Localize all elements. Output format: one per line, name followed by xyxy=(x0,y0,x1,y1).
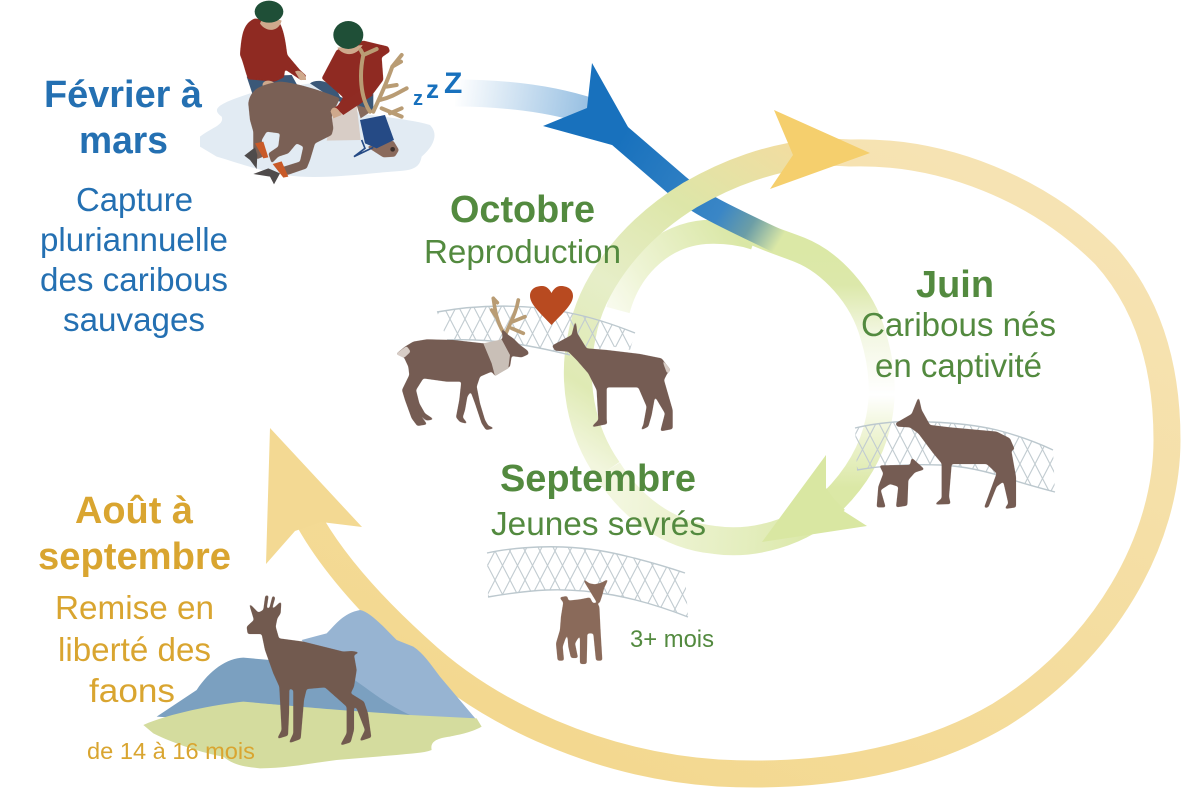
person 2 xyxy=(310,21,390,115)
meadow xyxy=(143,702,482,768)
female caribou xyxy=(552,319,673,431)
text: capture description xyxy=(40,181,228,338)
illustration: mating caribou pair xyxy=(396,298,673,431)
back mountain xyxy=(302,610,477,723)
illustration: mother and calf xyxy=(877,397,1016,509)
text: release description: faons xyxy=(89,672,175,709)
text: capture description: Capture xyxy=(76,181,193,218)
heading: Août à septembre: septembre xyxy=(38,536,231,578)
mother caribou xyxy=(895,397,1016,509)
person 1 xyxy=(240,1,307,97)
fence: juin enclosure xyxy=(855,421,1055,492)
fence: septembre enclosure xyxy=(487,547,688,617)
icon: heart xyxy=(530,286,573,325)
young deer xyxy=(247,595,371,746)
sleep symbol zzz: Z xyxy=(444,67,462,100)
male caribou xyxy=(396,298,529,430)
front mountain xyxy=(157,658,410,723)
heading: Août à septembre: Août à xyxy=(75,490,194,532)
text: release description xyxy=(55,589,214,709)
heading: Juin Caribous nés en captivité xyxy=(861,264,1056,384)
fence: octobre enclosure xyxy=(437,306,635,355)
sleep symbol zzz: z xyxy=(426,74,439,104)
heading: Février à mars xyxy=(44,74,203,162)
calf xyxy=(877,458,925,507)
text: capture description: sauvages xyxy=(63,301,205,338)
label: de 14 à 16 mois: de 14 à 16 mois xyxy=(87,738,255,764)
arrow: green to yellow loop with head xyxy=(578,110,870,470)
label: 3+ mois: 3+ mois xyxy=(630,626,714,653)
illustration: weaned fawn xyxy=(556,578,609,664)
heading: Septembre Jeunes sevrés xyxy=(491,458,706,542)
text: release description: liberté des xyxy=(58,631,211,668)
heading: Octobre Reproduction xyxy=(424,189,621,270)
scene: mountains, meadow and released deer xyxy=(143,595,482,768)
text: capture description: pluriannuelle xyxy=(40,221,228,258)
heading: Février à mars: mars xyxy=(79,120,168,162)
sleep symbol zzz xyxy=(413,67,462,110)
heading: Février à mars: Février à xyxy=(44,74,203,116)
sleep symbol zzz: z xyxy=(413,88,423,110)
heading: Octobre Reproduction: Reproduction xyxy=(424,233,621,270)
arrow: blue capture arrow xyxy=(455,63,790,247)
heading: Septembre Jeunes sevrés: Septembre xyxy=(500,458,696,500)
heading: Juin Caribous nés en captivité: Juin xyxy=(916,264,994,306)
scene: capture of wild caribou xyxy=(200,1,435,184)
arrow: large yellow outer loop xyxy=(266,152,1167,774)
sedated caribou xyxy=(244,49,407,184)
heading: Octobre Reproduction: Octobre xyxy=(450,189,595,231)
text: release description: Remise en xyxy=(55,589,214,626)
arrow: green loop right side xyxy=(608,228,882,542)
arrow: inner light green arc xyxy=(618,232,755,310)
heading: Juin Caribous nés en captivité: en captivité xyxy=(875,347,1042,384)
text: capture description: des caribous xyxy=(40,261,228,298)
snow patch xyxy=(200,83,435,177)
heading: Août à septembre xyxy=(38,490,231,578)
heading: Juin Caribous nés en captivité: Caribous nés xyxy=(861,306,1056,343)
heading: Septembre Jeunes sevrés: Jeunes sevrés xyxy=(491,505,706,542)
